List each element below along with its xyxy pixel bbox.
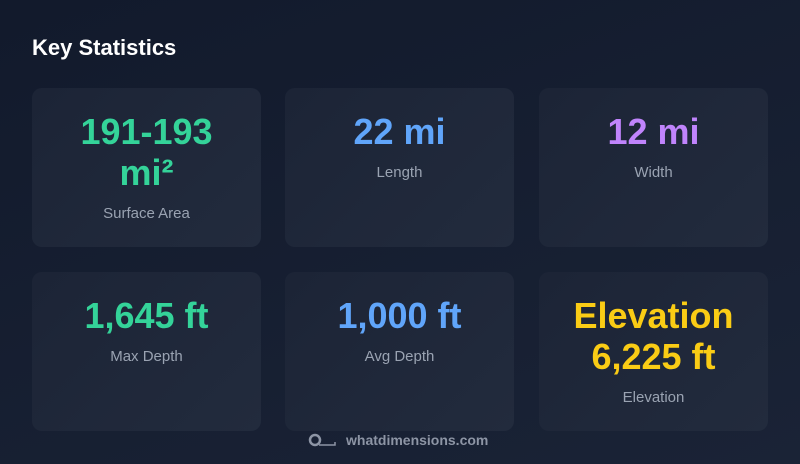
card: max depth: Max Depth [110,348,183,365]
card: surface area: mi² [120,152,174,193]
card: width: 12 mi [607,111,700,152]
card: elevation: 6,225 ft [591,336,716,377]
card: avg depth: Avg Depth [365,348,434,365]
card: width [539,88,768,247]
title: Key Statistics [32,35,176,60]
card: surface area: Surface Area [103,205,190,222]
card: width: Width [634,164,673,181]
card: avg depth: 1,000 ft [337,295,462,336]
card: elevation: Elevation [573,295,734,336]
footer logo: whatdimensions.com [346,432,488,448]
card: surface area: 191-193 [80,111,213,152]
card: length [285,88,514,247]
card: surface area [32,88,261,247]
card: elevation: Elevation [623,389,684,406]
card: avg depth [285,272,514,431]
card: elevation [539,272,768,431]
card: length: 22 mi [353,111,446,152]
card: length: Length [377,164,422,181]
card: max depth: 1,645 ft [84,295,209,336]
card: max depth [32,272,261,431]
